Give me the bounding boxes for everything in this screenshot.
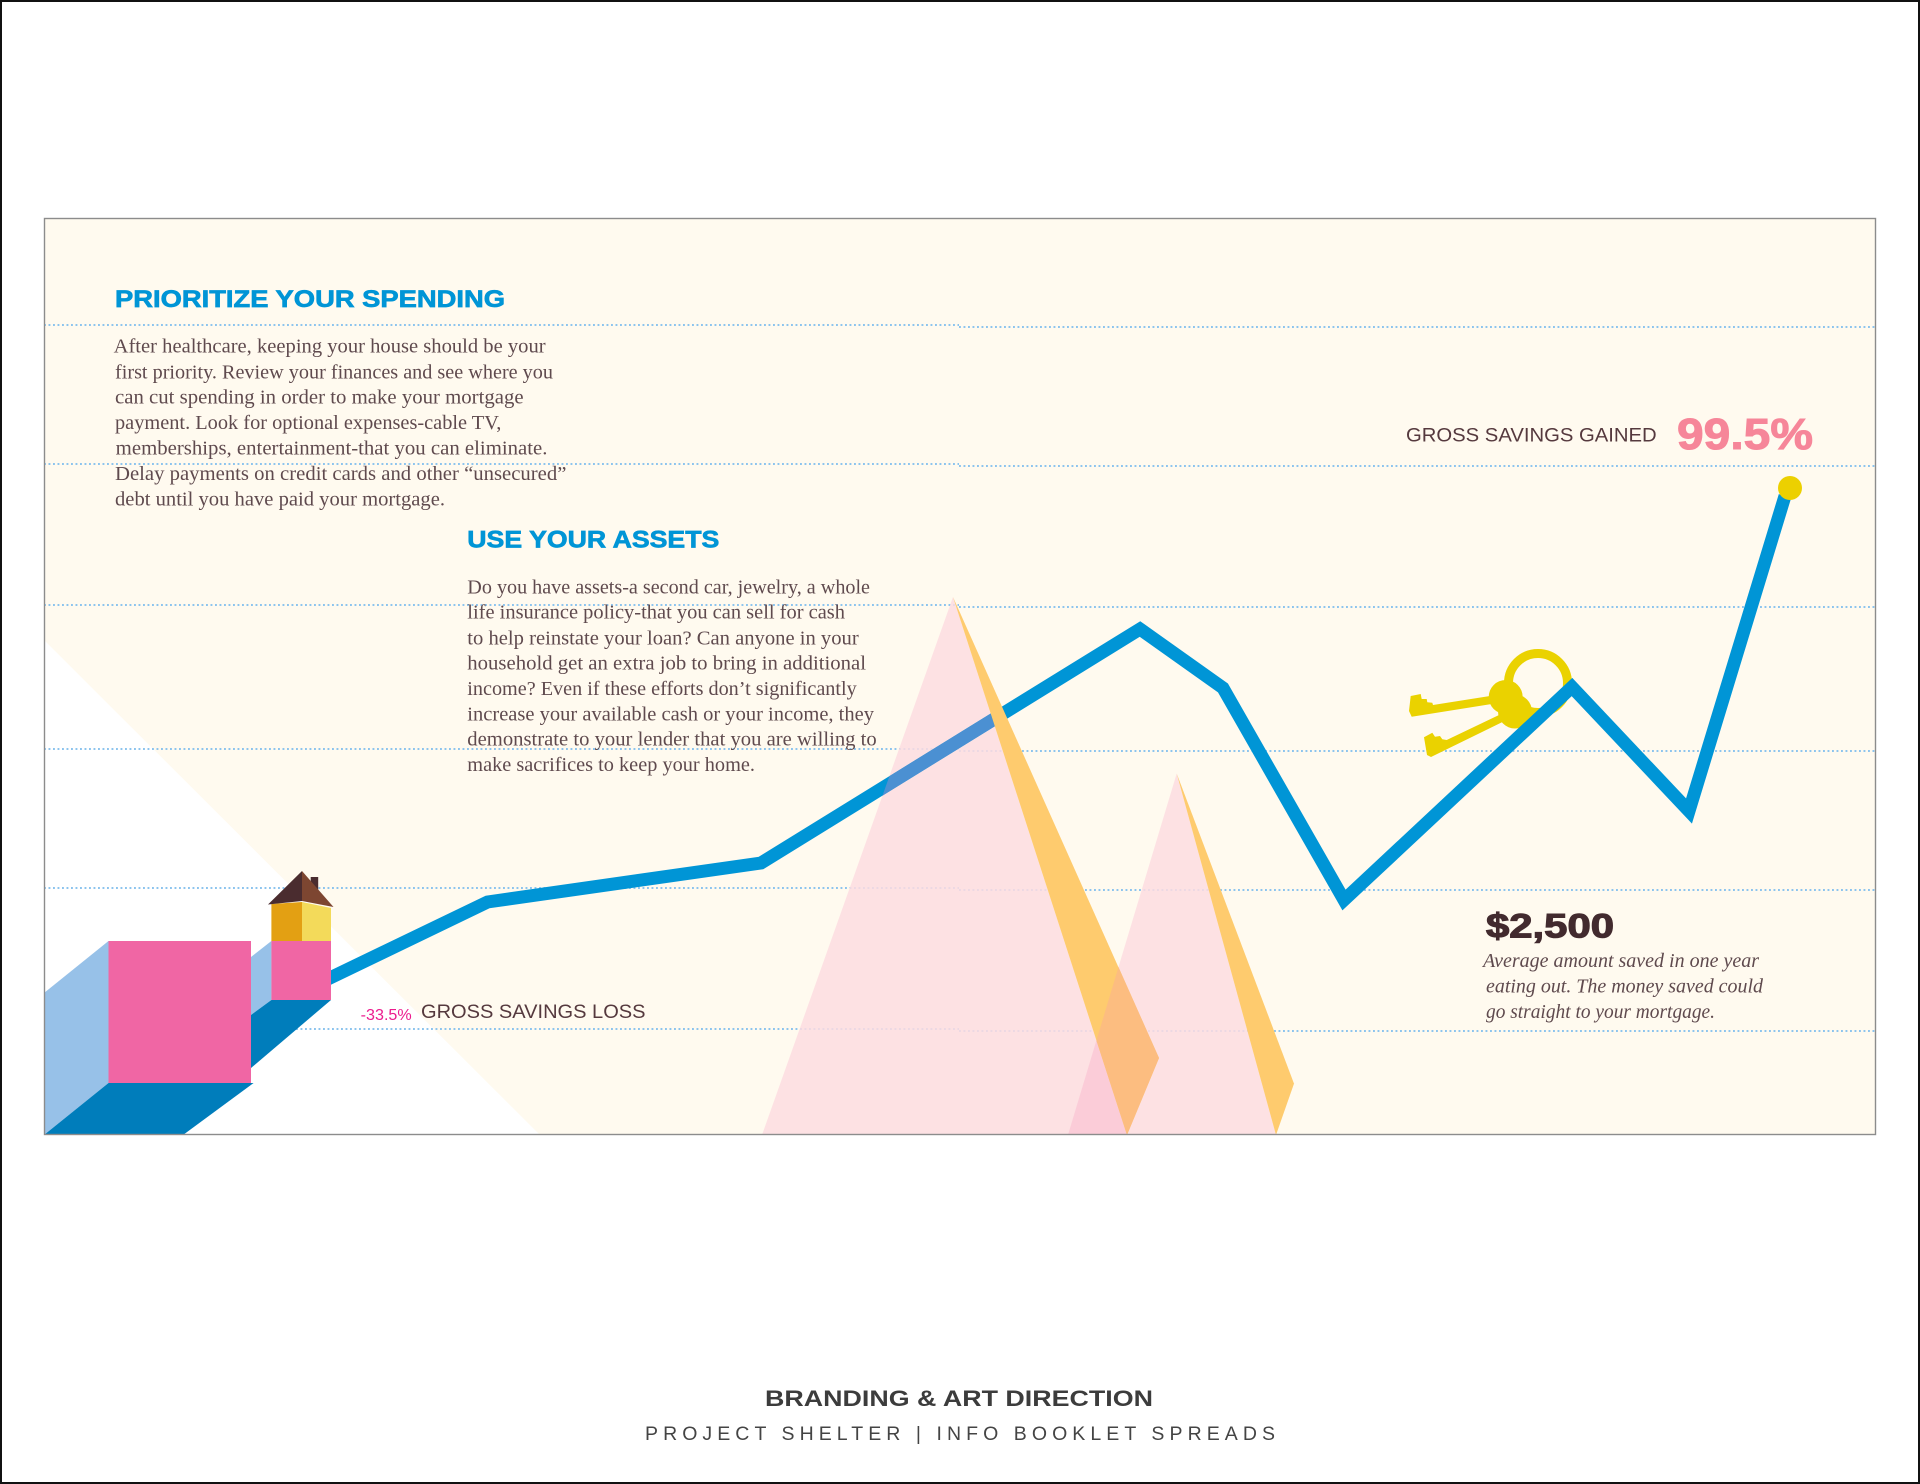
text block: assets body: make sacrifices to keep your home. [467,755,755,776]
panel: booklet spread background [44,218,1876,1134]
white diagonal corner [44,640,540,1135]
footer subtitle: PROJECT SHELTER | INFO BOOKLET SPREADS [645,1423,1275,1445]
icon: small stacked block [251,941,331,1068]
panel border [44,218,1876,1134]
text block: prioritize body: memberships, entertainment-that you can eliminate. [116,439,547,460]
text block: eating out note: eating out. The money saved could [1486,977,1763,998]
text block: prioritize body: debt until you have paid your mortgage. [115,490,445,511]
text block: assets body: income? Even if these efforts don’t significantly [467,679,857,700]
text block: prioritize body: first priority. Review your finances and see where you [115,362,553,383]
heading: prioritize your spending: PRIORITIZE YOUR SPENDING [115,286,505,313]
chart: savings line [305,496,1785,990]
chart: pink mountains [762,597,1276,1135]
stat: $2,500: $2,500 [1486,908,1614,946]
footer title: BRANDING & ART DIRECTION [765,1386,1153,1411]
text block: assets body: Do you have assets-a second car, jewelry, a whole [467,577,870,598]
icon: yellow end dot [1778,476,1802,500]
chart: yellow mountain faces [953,597,1294,1135]
icon: big block [44,941,254,1135]
text block: prioritize body: After healthcare, keeping your house should be your [114,337,546,358]
text block: assets body: household get an extra job to bring in additional [467,654,867,675]
text block: assets body: demonstrate to your lender that you are willing to [467,730,877,751]
line segment seen through the pink mountain [882,714,994,796]
icon: keys [1409,654,1568,757]
text block: assets body: to help reinstate your loan? Can anyone in your [467,628,859,649]
text block: prioritize body: Delay payments on credit cards and other “unsecured” [115,464,566,485]
text block: eating out note: go straight to your mortgage. [1486,1002,1715,1023]
stat: 99.5%: 99.5% [1677,410,1813,459]
heading: use your assets: USE YOUR ASSETS [467,527,719,554]
text block: assets body [467,577,877,776]
text block: eating out note: Average amount saved in one year [1481,951,1759,972]
text block: prioritize body: payment. Look for optional expenses-cable TV, [115,413,501,434]
text block: prioritize body [114,337,566,511]
icon: house [268,871,334,941]
text block: prioritize body: can cut spending in order to make your mortgage [115,388,524,409]
label: gross savings loss: GROSS SAVINGS LOSS [421,1002,646,1023]
text block: assets body: life insurance policy-that you can sell for cash [467,603,845,624]
stat: -33.5%: -33.5% [361,1007,412,1024]
text block: assets body: increase your available cash or your income, they [467,704,874,725]
text block: eating out note [1481,951,1763,1023]
label: gross savings gained: GROSS SAVINGS GAINED [1406,425,1657,446]
